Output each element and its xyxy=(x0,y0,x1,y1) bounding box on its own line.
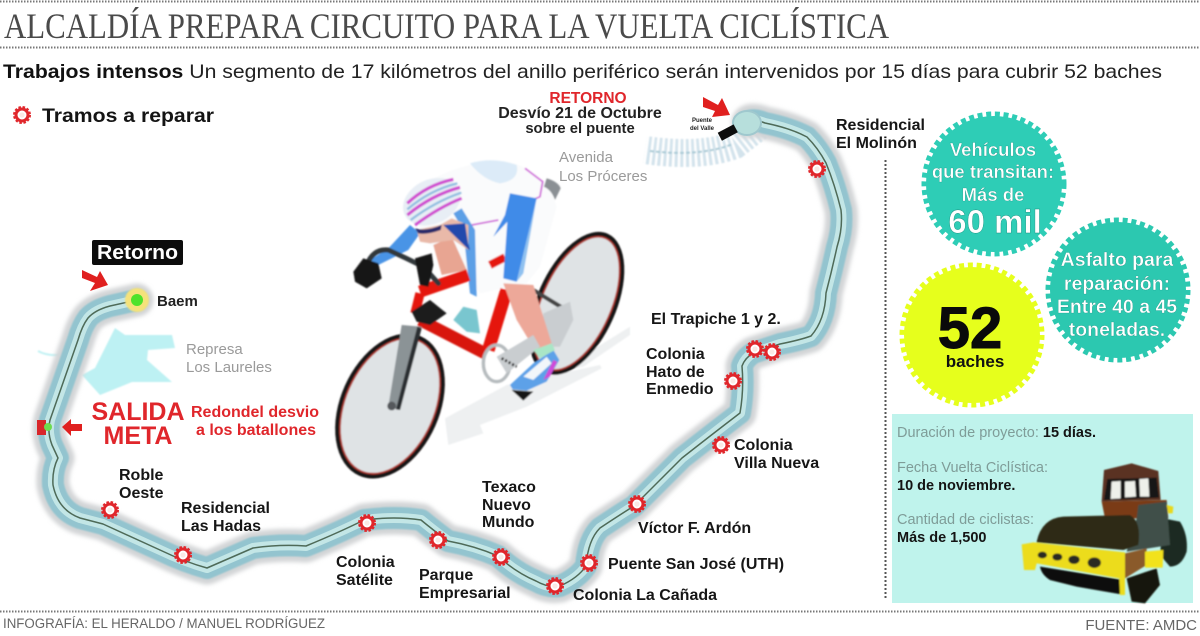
cab windows xyxy=(1104,478,1159,500)
project text: Fecha Vuelta Ciclística: xyxy=(897,460,1048,476)
label: Colonia La Cañada: Colonia La Cañada xyxy=(573,587,717,604)
badge: vehículos: que transitan: xyxy=(932,161,1054,182)
label: Colonia Satélite: Colonia xyxy=(336,554,395,571)
label: retorno desvío 21 de Octubre xyxy=(498,90,662,137)
shadow xyxy=(445,327,630,445)
label: Texaco Nuevo Mundo: Nuevo xyxy=(482,497,531,514)
arrow: retorno este xyxy=(703,97,730,117)
label: Baem: Baem xyxy=(157,293,198,310)
small label with bridge icon: Puente xyxy=(692,118,713,124)
label: Colonia Villa Nueva: Villa Nueva xyxy=(734,455,819,472)
arrow: salida xyxy=(62,419,82,436)
label: redondel desvio: a los batallones xyxy=(196,422,316,439)
label: Colonia Hato de Enmedio: Enmedio xyxy=(646,381,714,398)
label: Roble Oeste: Oeste xyxy=(119,485,164,502)
label: Colonia Hato de Enmedio: Colonia xyxy=(646,346,705,363)
start and finish marker xyxy=(37,420,52,435)
label: Represa Los Laureles: Los Laureles xyxy=(186,359,272,376)
small label with bridge icon: del Valle xyxy=(690,126,715,132)
label: Represa Los Laureles: Represa xyxy=(186,341,243,358)
label: Avenida Los Próceres: Los Próceres xyxy=(559,168,647,185)
project text: 10 de noviembre. xyxy=(897,478,1015,494)
credit: INFOGRAFÍA: EL HERALDO / MANUEL RODRÍGUEZ xyxy=(3,616,325,631)
badge: asfalto: reparación: xyxy=(1064,273,1170,295)
pedal xyxy=(512,390,533,401)
title: ALCALDÍA PREPARA CIRCUITO PARA LA VUELTA CICLÍSTICA xyxy=(4,6,889,46)
small label with bridge icon xyxy=(690,118,738,141)
red frame xyxy=(415,257,507,353)
label: Residencial Las Hadas: Las Hadas xyxy=(181,518,261,535)
lower wheel xyxy=(1127,568,1160,603)
stem xyxy=(412,300,447,325)
label: Residencial Las Hadas: Residencial xyxy=(181,500,270,517)
label: Texaco Nuevo Mundo: Texaco xyxy=(482,479,536,496)
drum xyxy=(1037,515,1139,550)
label: Parque Empresarial: Empresarial xyxy=(419,585,511,602)
label: Colonia Satélite: Satélite xyxy=(336,572,393,589)
yellow front frame xyxy=(1022,542,1125,595)
front wheel xyxy=(317,319,463,493)
source: FUENTE: AMDC xyxy=(1085,617,1197,634)
badge: vehículos: Vehículos xyxy=(950,139,1036,160)
near leg shorts xyxy=(493,193,537,282)
label: retorno desvío 21 de Octubre: RETORNO xyxy=(549,90,627,107)
project text: 15 días. xyxy=(1039,425,1096,441)
cab roof xyxy=(1102,463,1161,502)
badge: asfalto: Entre 40 a 45 xyxy=(1057,296,1177,318)
shorts xyxy=(447,223,470,250)
label: Colonia Hato de Enmedio: Hato de xyxy=(646,364,705,381)
legend: tramos a reparar: Tramos a reparar xyxy=(42,105,214,127)
near shoe xyxy=(510,350,559,391)
crank xyxy=(483,345,510,382)
label: Residencial El Molinón: Residencial xyxy=(836,117,925,134)
badge: 52 baches xyxy=(902,265,1042,405)
route map: ring road xyxy=(37,111,842,586)
badge: asfalto: Asfalto para xyxy=(1061,249,1173,271)
label: Avenida Los Próceres: Avenida xyxy=(559,149,614,166)
label: Residencial El Molinón: El Molinón xyxy=(836,135,917,152)
Baem marker xyxy=(125,288,149,312)
torso xyxy=(420,162,557,293)
rear wheel xyxy=(1160,518,1187,567)
near leg skin xyxy=(503,283,552,350)
avenue: Avenida Los Próceres stripes xyxy=(645,124,762,153)
seat stay xyxy=(533,290,563,308)
badge: asfalto xyxy=(1048,220,1188,360)
project text: Más de 1,500 xyxy=(897,530,986,546)
cyclist illustration xyxy=(317,160,641,493)
pink straps xyxy=(472,168,543,225)
label: salida meta: META xyxy=(104,422,172,450)
label: El Trapiche: El Trapiche 1 y 2. xyxy=(651,311,781,328)
badge: 52 baches: 52 xyxy=(938,296,1002,361)
badge: asfalto: toneladas. xyxy=(1069,319,1165,341)
badge: vehículos xyxy=(924,114,1064,254)
label: Colonia Villa Nueva: Colonia xyxy=(734,437,793,454)
rear derailleur xyxy=(540,302,573,347)
badge: vehículos: 60 mil xyxy=(948,203,1042,240)
arrow: retorno oeste xyxy=(82,270,108,291)
handlebar xyxy=(367,250,438,283)
label: retorno desvío 21 de Octubre: Desvío 21 de Octubre xyxy=(498,105,662,122)
badge: 52 baches: baches xyxy=(946,352,1004,371)
label: retorno desvío 21 de Octubre: sobre el puente xyxy=(525,121,635,137)
far leg xyxy=(433,237,467,275)
rear wheel xyxy=(512,221,641,386)
lake: Represa Los Laureles xyxy=(38,328,175,395)
road roller illustration xyxy=(1022,463,1187,603)
label: Texaco Nuevo Mundo: Mundo xyxy=(482,514,535,531)
label: salida meta: SALIDA xyxy=(91,398,185,426)
subtitle: Trabajos intensos Un segmento de 17 kilómetros del anillo periférico serán intervenidos por 15 días para cubrir 52 baches xyxy=(3,61,1162,83)
far arm xyxy=(370,225,420,265)
retorno label: Retorno xyxy=(97,242,178,264)
label: Víctor F. Ardón: Víctor F. Ardón xyxy=(638,520,751,537)
helmet xyxy=(395,169,468,235)
label: redondel desvio: Redondel desvio xyxy=(191,404,319,421)
fork xyxy=(388,325,422,410)
label: Puente San José: Puente San José (UTH) xyxy=(608,556,784,573)
saddle xyxy=(544,178,561,200)
panel: project data xyxy=(892,414,1193,603)
badge: vehículos: Más de xyxy=(962,184,1024,205)
roundabout at top return xyxy=(733,111,761,135)
face xyxy=(417,218,468,250)
vertical divider xyxy=(884,160,886,600)
repair markers xyxy=(103,162,824,593)
project text: Duración de proyecto: xyxy=(897,425,1039,441)
label: Roble Oeste: Roble xyxy=(119,467,164,484)
far shoe xyxy=(453,307,480,333)
cab body xyxy=(1102,500,1168,518)
project text: Cantidad de ciclistas: xyxy=(897,512,1034,528)
label: Parque Empresarial: Parque xyxy=(419,567,473,584)
